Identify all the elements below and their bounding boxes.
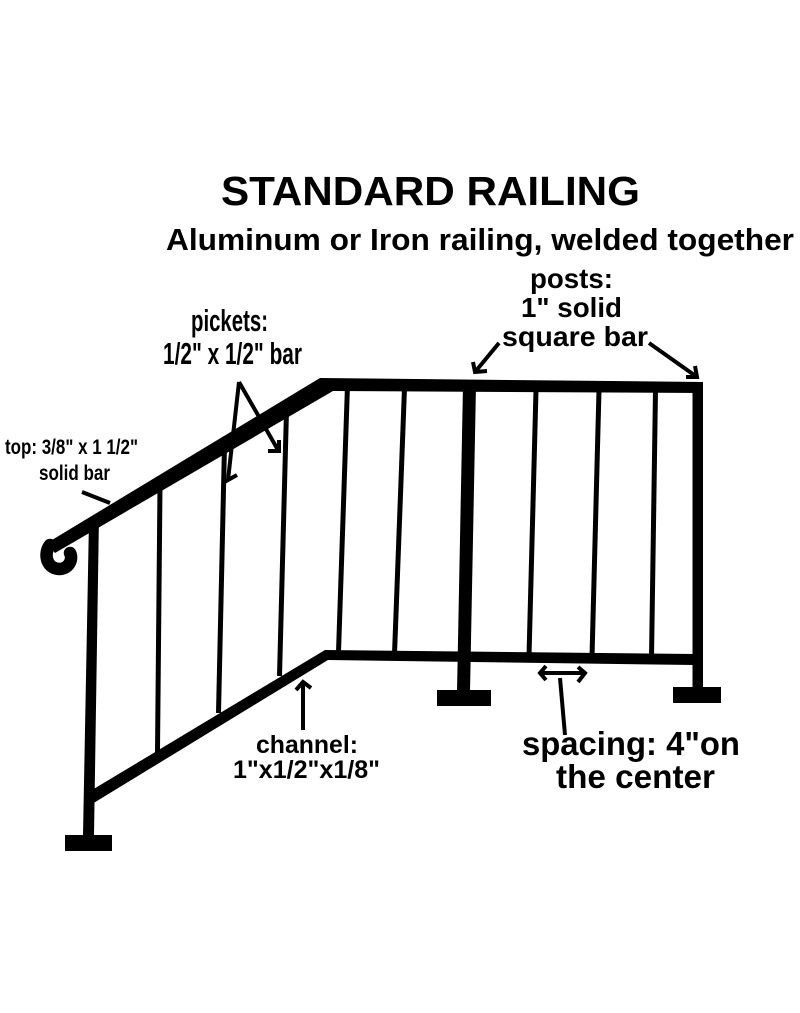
posts label: [502, 263, 648, 352]
railing drawing: [47, 378, 703, 835]
left post: [83, 515, 99, 835]
posts label: 1" solid: [521, 292, 622, 323]
arrow: spacing leader: [560, 678, 565, 735]
middle post: [457, 385, 476, 692]
channel label: 1"x1/2"x1/8": [233, 756, 380, 784]
arrow: channel: [296, 682, 311, 730]
arrow: top bar: [82, 492, 110, 503]
right post: [692, 382, 703, 688]
bottom channel: [92, 650, 694, 804]
scroll end: [47, 545, 71, 569]
top bar label: solid bar: [39, 462, 110, 485]
pickets label: [163, 303, 302, 371]
posts label: posts:: [530, 263, 613, 294]
top bar label: top: 3/8" x 1 1/2": [5, 436, 138, 459]
arrow: picket left: [228, 382, 239, 480]
spacing label: spacing: 4"on: [522, 725, 740, 762]
spacing label: [522, 725, 740, 795]
arrow: post right: [649, 343, 697, 377]
pickets: [158, 385, 656, 752]
spacing label: the center: [556, 758, 715, 795]
title: STANDARD RAILING: [221, 168, 640, 214]
arrow: picket right: [239, 382, 279, 451]
pickets label: 1/2" x 1/2" bar: [163, 336, 302, 371]
pickets label: pickets:: [191, 303, 268, 338]
arrow: spacing: [540, 666, 585, 682]
foot plates: [65, 687, 721, 851]
channel label: [233, 731, 380, 784]
subtitle: Aluminum or Iron railing, welded together: [166, 222, 794, 257]
posts label: square bar: [502, 321, 648, 352]
arrow: post middle: [473, 343, 499, 372]
annotation arrows: [82, 343, 697, 735]
channel label: channel:: [256, 731, 358, 759]
top bar label: [5, 436, 138, 485]
top rail: [47, 378, 703, 553]
